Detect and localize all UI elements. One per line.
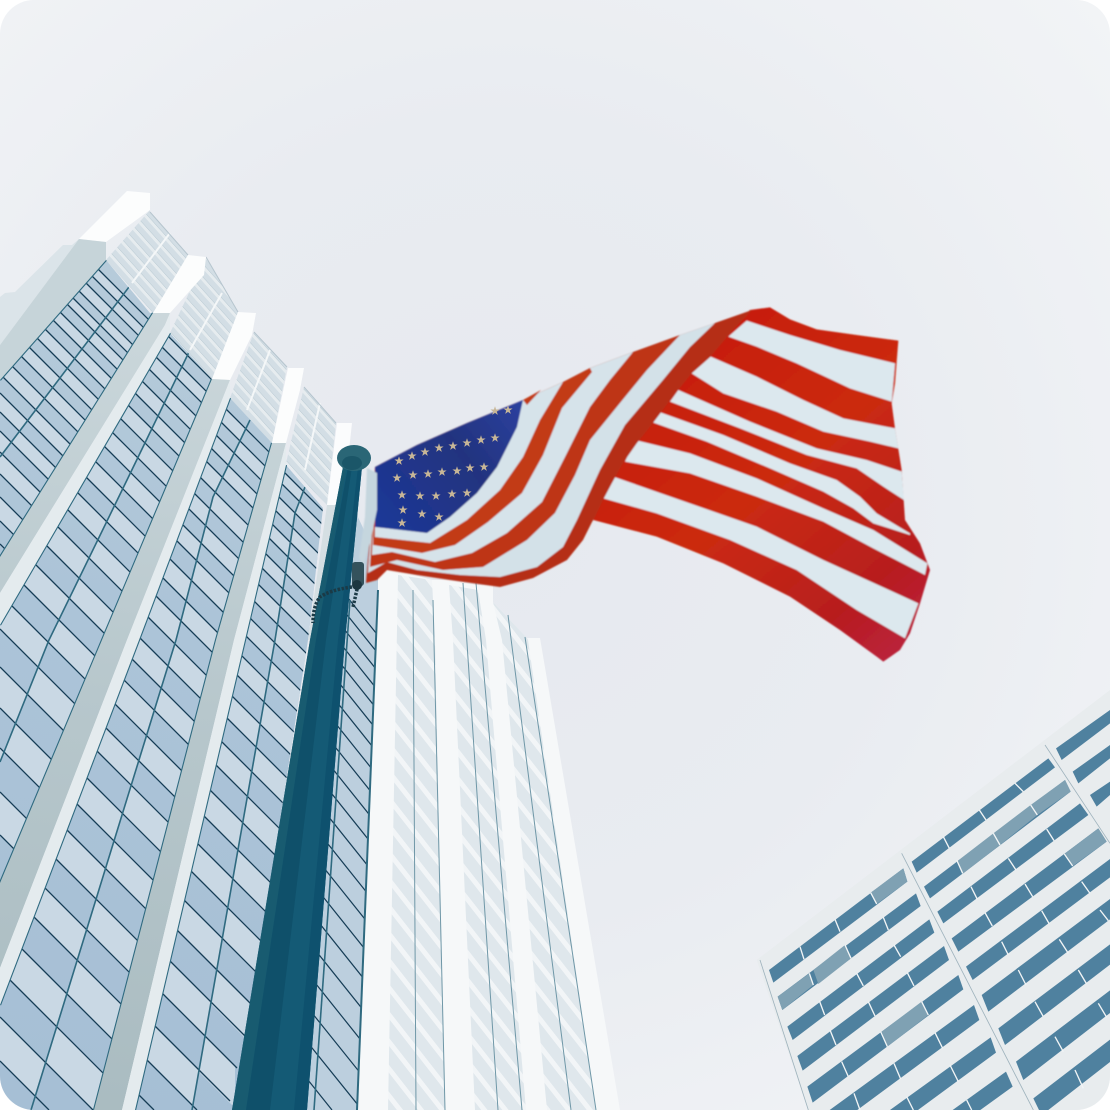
flag clip and rope [313,562,364,623]
flag: stars [392,405,513,527]
left tower: concrete fins [0,191,352,1110]
left tower: glass bay 1 [0,260,153,557]
left tower: glass bay 3 [0,398,272,1110]
windows: blue glass rows [769,710,1110,1110]
flag: fold and left stripes [366,310,752,587]
flagpole [232,445,371,1110]
windows: lighter reflecting panes [778,780,1107,1047]
right office building [757,690,1110,1110]
left tower: glass bay 4 [135,465,323,1110]
flag: hoist hem [359,468,377,567]
left tower: glass bay 2 [0,333,212,883]
left tower: glass bay right of the pole [307,516,379,1110]
flag: right waving section with stripes [593,307,930,662]
left tower: upper pale glass [106,210,336,505]
flag: blue canton [375,400,523,533]
flag [359,307,930,662]
white tower behind the flag [357,570,620,1110]
